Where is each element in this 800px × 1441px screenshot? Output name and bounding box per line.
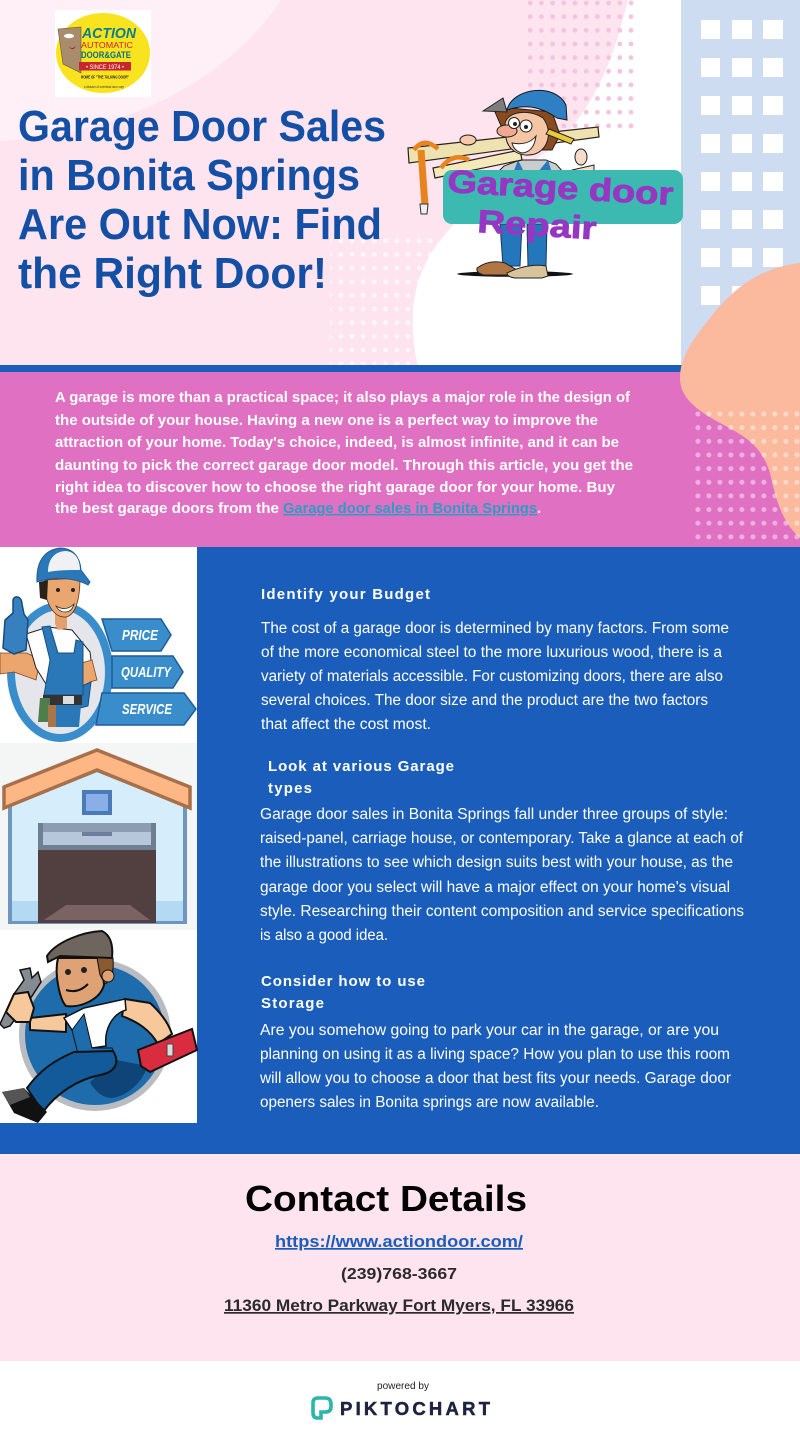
label: garage door repair: Repair <box>477 203 598 246</box>
icon: company logo: • SINCE 1974 • <box>86 65 124 71</box>
title: the Right Door! <box>18 249 327 298</box>
text block: look at various garage types: garage door you select will have a major effect on your home's visual <box>260 879 730 896</box>
text block: look at various garage types: raised-panel, carriage house, or contemporary. Take a glance at each of <box>260 830 744 847</box>
text block: identify your budget: variety of materials accessible. For customizing doors, there are also <box>261 668 723 685</box>
panel: introduction: Garage door sales in Bonita Springs <box>283 501 537 517</box>
panel: introduction: daunting to pick the correct garage door model. Through this article, you get the <box>55 458 633 474</box>
text block: consider how to use storage: Consider how to use <box>261 973 425 990</box>
icon: company logo: AUTOMATIC <box>81 40 133 50</box>
icon: company logo <box>55 10 151 97</box>
panel: introduction: the outside of your house. Having a new one is a perfect way to improve the <box>55 413 598 429</box>
panel: blue square pattern <box>681 0 800 366</box>
panel: introduction: A garage is more than a practical space; it also plays a major role in the design of <box>55 390 630 406</box>
text block: look at various garage types: the illustrations to see which design suits best with your house, as the <box>260 854 733 871</box>
panel: contact details: https://www.actiondoor.com/ <box>275 1232 523 1251</box>
icon: running repairman <box>0 930 197 1123</box>
text block: consider how to use storage <box>259 973 731 1111</box>
text block: look at various garage types: Look at various Garage <box>268 758 454 775</box>
footer: powered by piktochart: powered by <box>377 1380 430 1392</box>
title: Are Out Now: Find <box>18 200 382 249</box>
panel: contact details: 11360 Metro Parkway Fort Myers, FL 33966 <box>224 1296 574 1315</box>
icon: price quality service worker <box>0 547 197 743</box>
text block: look at various garage types: style. Researching their content composition and service specifications <box>260 903 744 920</box>
text block: identify your budget: The cost of a garage door is determined by many factors. From some <box>261 620 729 637</box>
label: garage door repair: Garage door <box>447 163 674 212</box>
text block: identify your budget: Identify your Budget <box>261 586 430 603</box>
panel: tips <box>0 547 800 1154</box>
footer: powered by piktochart: PIKTOCHART <box>340 1398 491 1419</box>
text block: identify your budget <box>261 586 729 733</box>
title: in Bonita Springs <box>18 151 360 200</box>
icon: company logo: DOOR&GATE <box>81 50 131 61</box>
text block: consider how to use storage: Are you somehow going to park your car in the garage, or are you <box>260 1022 719 1039</box>
text block: identify your budget: several choices. The door size and the product are the two factors <box>261 692 708 709</box>
panel: introduction: . <box>537 501 541 517</box>
panel: contact details: Contact Details <box>245 1178 527 1219</box>
text block: look at various garage types <box>260 758 744 944</box>
icon: company logo: a division of overhead door corp <box>84 85 124 89</box>
text block: identify your budget: of the more economical steel to the more luxurious wood, there is a <box>261 644 722 661</box>
text block: identify your budget: that affect the cost most. <box>261 716 431 733</box>
text block: look at various garage types: is also a good idea. <box>260 927 388 944</box>
icon: price quality service worker: QUALITY <box>121 664 173 681</box>
text block: consider how to use storage: Storage <box>261 995 324 1012</box>
text block: look at various garage types: Garage door sales in Bonita Springs fall under three groups of style: <box>260 806 728 823</box>
panel: contact details: (239)768-3667 <box>341 1266 457 1283</box>
icon: carpenter with planks <box>408 90 599 278</box>
panel: contact details <box>0 1154 800 1361</box>
text block: consider how to use storage: planning on using it as a living space? How you plan to use this room <box>260 1046 730 1063</box>
icon: company logo: ACTION <box>81 25 137 42</box>
panel: introduction: right idea to discover how to choose the right garage door for your home. Buy <box>55 480 615 496</box>
panel: introduction <box>0 263 800 547</box>
title: Garage Door Sales <box>18 102 386 151</box>
header background <box>0 0 800 366</box>
title <box>18 102 386 298</box>
text block: look at various garage types: types <box>268 780 312 797</box>
panel: introduction: attraction of your home. Today's choice, indeed, is almost infinite, and it can be <box>55 435 619 451</box>
footer: powered by piktochart <box>0 1361 800 1441</box>
text block: consider how to use storage: openers sales in Bonita springs are now available. <box>260 1094 599 1111</box>
text block: consider how to use storage: will allow you to choose a door that best fits your needs. Garage door <box>259 1070 731 1087</box>
icon: price quality service worker: PRICE <box>122 627 159 644</box>
panel: introduction: the best garage doors from the <box>55 501 279 517</box>
icon: company logo: HOME OF "THE TALKING DOOR" <box>81 74 129 80</box>
label: garage door repair <box>443 163 683 246</box>
icon: garage building <box>0 743 197 930</box>
icon: price quality service worker: SERVICE <box>122 701 173 718</box>
